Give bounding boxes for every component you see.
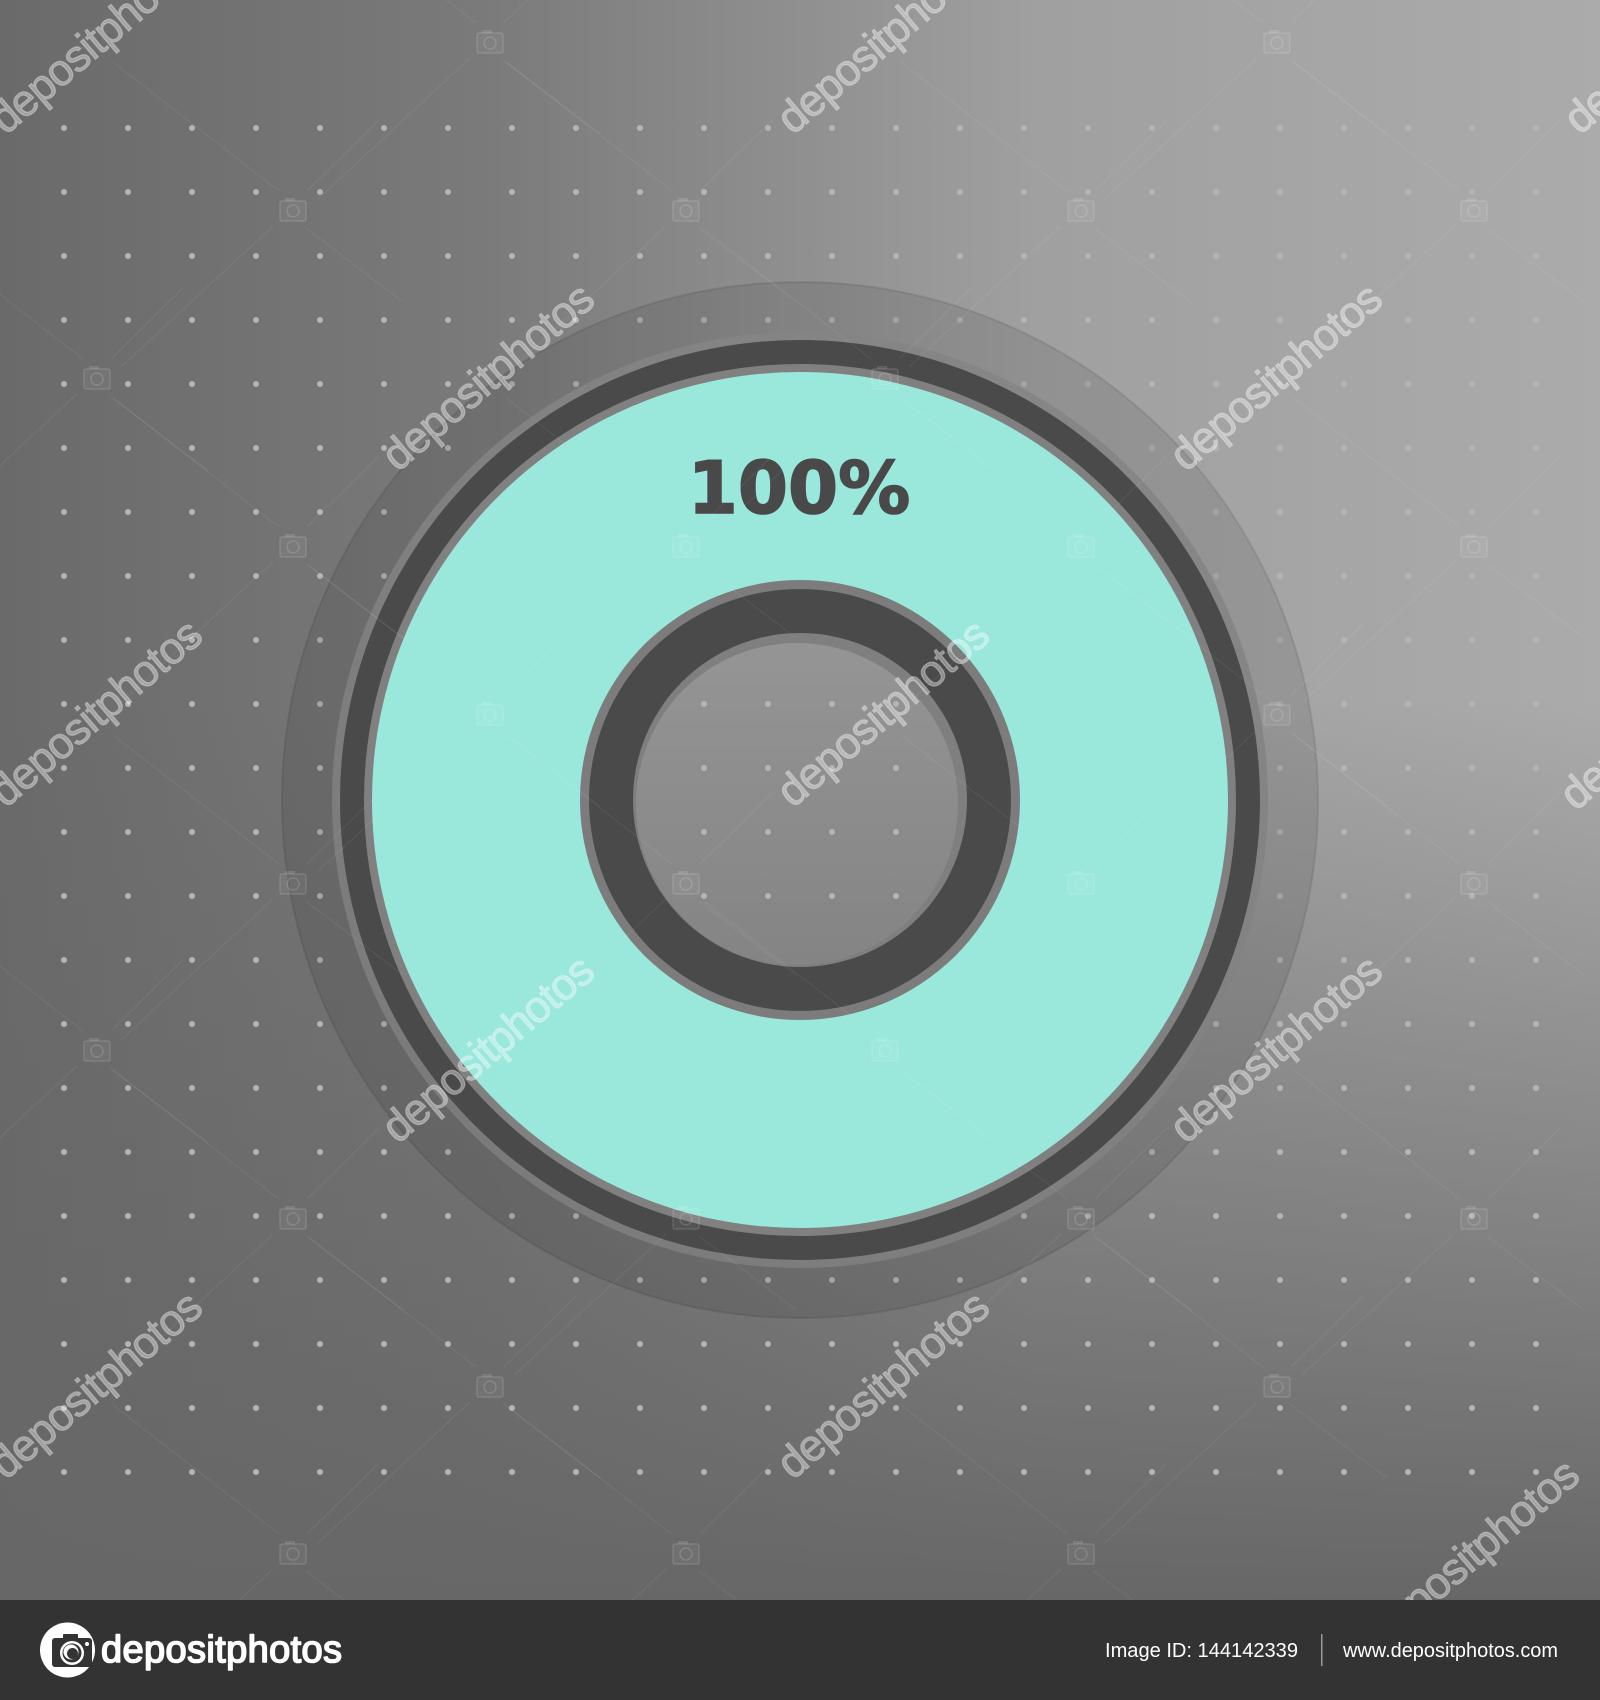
dot grid pattern bbox=[32, 96, 1568, 1504]
depositphotos diagonal watermarks: depositphotos bbox=[1160, 945, 1392, 1152]
footer bar bbox=[0, 1600, 1600, 1700]
inner ring border bbox=[580, 580, 1020, 1020]
hub dots bbox=[704, 704, 896, 896]
site url: www.depositphotos.com bbox=[1342, 1640, 1558, 1662]
depositphotos diagonal watermarks: depositphotos bbox=[372, 945, 604, 1152]
hub centre bbox=[636, 643, 958, 965]
progress fill 100% bbox=[372, 372, 1228, 1228]
inner dark ring bbox=[589, 589, 1011, 1011]
dark track ring bbox=[340, 340, 1260, 1260]
grey ring border bbox=[364, 364, 1236, 1236]
image id: Image ID: 144142339 bbox=[1105, 1640, 1298, 1662]
hub rim bbox=[633, 633, 967, 967]
outer translucent ring bbox=[282, 282, 1318, 1318]
depositphotos diagonal watermarks: depositphotos bbox=[1160, 273, 1392, 480]
depositphotos diagonal watermarks: depositphotos bbox=[767, 1281, 999, 1488]
donut chart: 100% bbox=[282, 282, 1318, 1318]
depositphotos diagonal watermarks: depositphotos bbox=[1357, 1449, 1589, 1656]
percentage label: 100% bbox=[688, 446, 910, 530]
depositphotos diagonal watermarks: depositphotos bbox=[767, 609, 999, 816]
divider bbox=[1321, 1634, 1322, 1666]
depositphotos diagonal watermarks: depositphotos bbox=[372, 273, 604, 480]
logo wordmark: depositphotos bbox=[101, 1629, 342, 1671]
light ring band bbox=[332, 332, 1268, 1268]
icon: depositphotos camera logo bbox=[40, 1622, 95, 1678]
